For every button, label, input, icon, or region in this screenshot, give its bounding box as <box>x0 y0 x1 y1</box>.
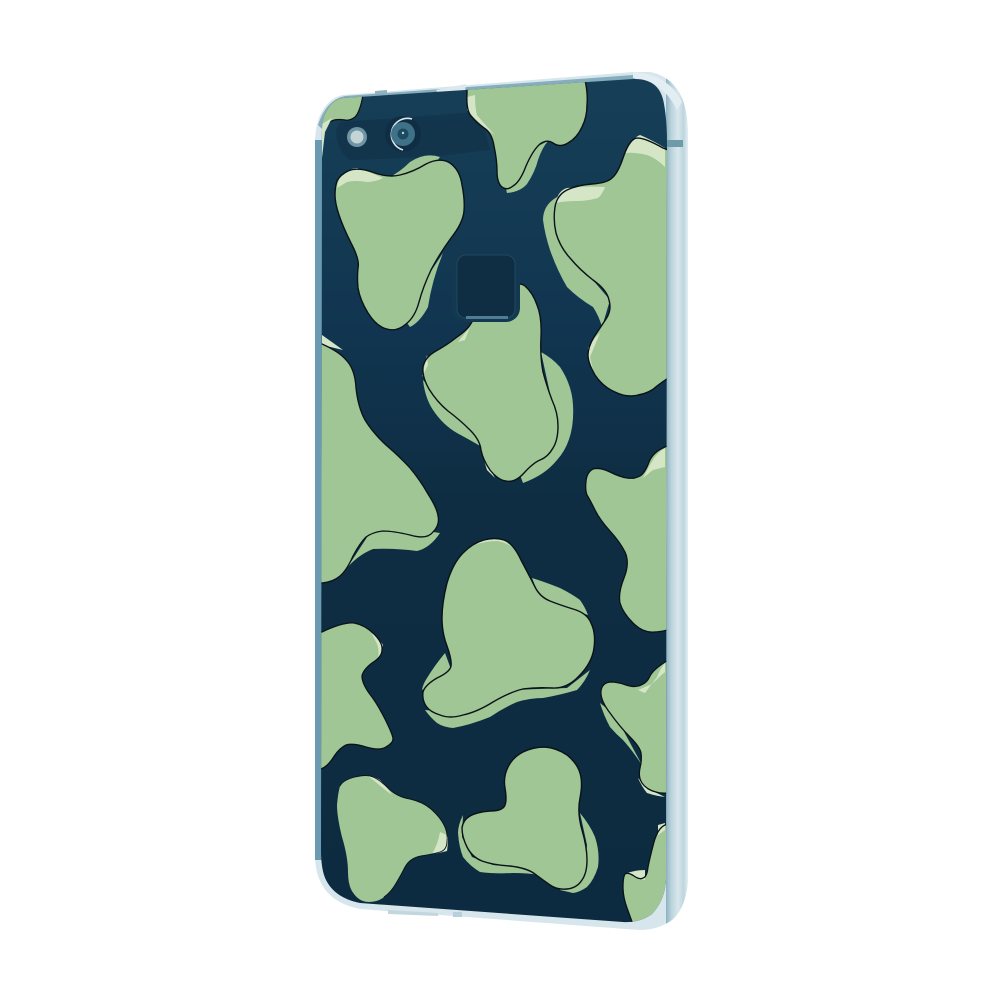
blob: center <box>422 284 573 483</box>
blob: bottom right <box>622 823 666 922</box>
blob: upper left <box>335 155 464 330</box>
green blob pattern <box>321 82 667 922</box>
camera band <box>336 112 490 160</box>
case back body <box>321 79 667 922</box>
blob: top right <box>543 135 680 396</box>
camera lens <box>385 116 421 152</box>
phone case illustration <box>315 72 688 930</box>
blob: bottom center <box>458 747 599 893</box>
blob: lower left <box>321 622 394 770</box>
blob: big lower center <box>422 538 595 728</box>
blob: right lower <box>600 660 666 797</box>
blob: top center <box>467 70 587 193</box>
fingerprint sensor <box>452 250 520 322</box>
blob: bottom left <box>337 775 448 902</box>
blob: top left corner <box>322 96 364 158</box>
blob: left large <box>321 335 440 584</box>
blob: right middle <box>585 446 667 633</box>
case outer shell <box>315 60 688 940</box>
camera flash <box>347 127 367 147</box>
